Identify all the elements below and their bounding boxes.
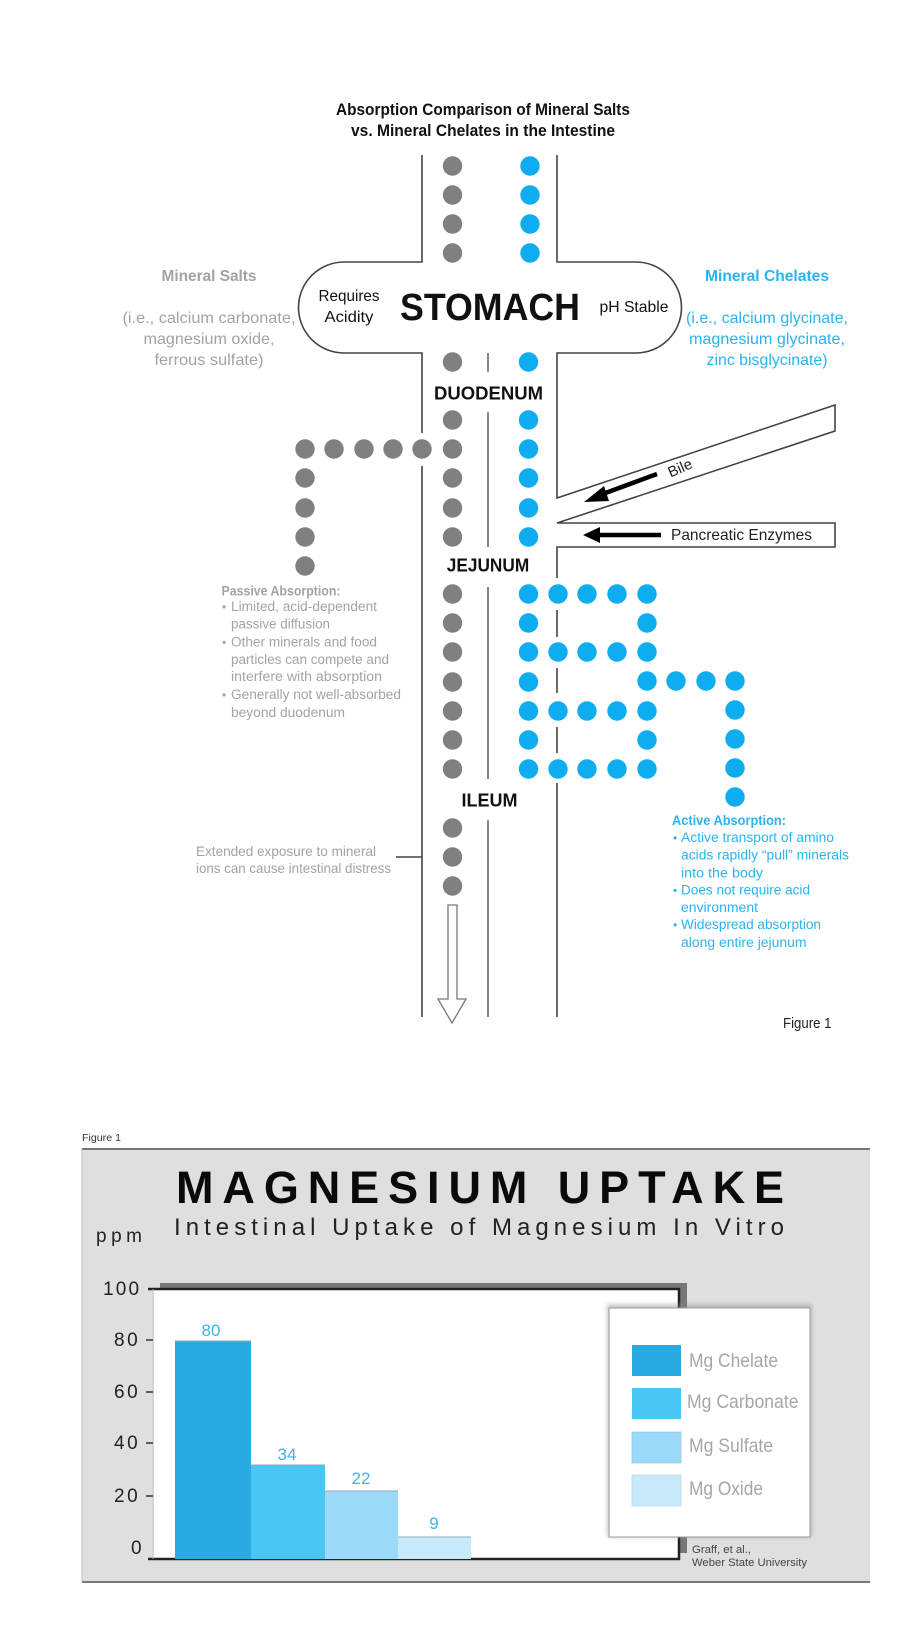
source note: Weber State University bbox=[692, 1557, 807, 1569]
legend bbox=[607, 1304, 812, 1537]
passive absorption text: interfere with absorption bbox=[231, 669, 382, 684]
mineral chelates label bbox=[686, 268, 848, 369]
intestine section labels: ILEUM bbox=[462, 790, 518, 810]
title: Absorption Comparison of Mineral Salts bbox=[336, 101, 630, 119]
mineral chelates label: zinc bisglycinate) bbox=[706, 352, 828, 369]
source note: Graff, et al., bbox=[692, 1544, 751, 1556]
mineral chelates label: magnesium glycinate, bbox=[689, 331, 845, 348]
bar values bbox=[202, 1321, 439, 1533]
legend: Mg Carbonate bbox=[687, 1391, 798, 1413]
passive absorption text: Passive Absorption: bbox=[222, 584, 340, 598]
active absorption text: Active transport of amino bbox=[681, 830, 834, 845]
mineral chelates blue dots path bbox=[519, 156, 745, 807]
source note bbox=[692, 1544, 807, 1569]
passive absorption text: passive diffusion bbox=[231, 616, 330, 632]
passive absorption text: • bbox=[222, 600, 226, 614]
passive absorption text: Limited, acid-dependent bbox=[231, 599, 377, 614]
bars bbox=[175, 1341, 471, 1559]
bile arrow and label bbox=[584, 456, 695, 502]
y axis labels bbox=[103, 1279, 142, 1559]
intestine section labels bbox=[434, 382, 543, 810]
mineral salts label: ferrous sulfate) bbox=[154, 352, 264, 369]
bar values: 80 bbox=[202, 1321, 220, 1340]
title bbox=[336, 101, 630, 140]
mineral salts label: Mineral Salts bbox=[162, 268, 257, 285]
bar values: 34 bbox=[278, 1445, 296, 1464]
mineral salts label bbox=[122, 268, 296, 369]
legend: Mg Sulfate bbox=[689, 1435, 773, 1457]
active absorption text: • bbox=[673, 918, 677, 932]
y axis unit: ppm bbox=[96, 1226, 142, 1247]
intestine section labels: JEJUNUM bbox=[447, 554, 529, 576]
stomach labels: pH Stable bbox=[600, 299, 669, 316]
passive absorption text: Generally not well-absorbed bbox=[231, 687, 401, 702]
active absorption text: Widespread absorption bbox=[681, 917, 821, 932]
bar values: 22 bbox=[352, 1469, 370, 1488]
y axis labels: 60 bbox=[114, 1382, 140, 1403]
active absorption text: Active Absorption: bbox=[672, 813, 786, 828]
active absorption text: acids rapidly “pull” minerals bbox=[681, 848, 849, 862]
active absorption text: environment bbox=[681, 900, 758, 915]
intestinal distress note bbox=[196, 843, 391, 876]
passive absorption text: particles can compete and bbox=[231, 652, 389, 667]
intestine walls and stomach outline bbox=[298, 155, 835, 1017]
mineral chelates label: Mineral Chelates bbox=[705, 268, 829, 285]
intestine section labels: DUODENUM bbox=[434, 382, 543, 404]
passive absorption text: • bbox=[222, 636, 226, 650]
stomach labels bbox=[318, 287, 669, 329]
mineral salts label: magnesium oxide, bbox=[144, 331, 274, 348]
legend: Mg Oxide bbox=[689, 1478, 763, 1500]
subheading: Intestinal Uptake of Magnesium In Vitro bbox=[174, 1214, 784, 1241]
hollow down arrow bbox=[438, 905, 466, 1023]
mineral chelates label: (i.e., calcium glycinate, bbox=[686, 310, 848, 327]
pancreatic enzymes arrow and label bbox=[583, 527, 812, 544]
bar values: 9 bbox=[429, 1514, 439, 1533]
y axis labels: 40 bbox=[114, 1433, 140, 1454]
heading: MAGNESIUM UPTAKE bbox=[176, 1162, 784, 1213]
stomach labels: Requires bbox=[318, 288, 380, 305]
bar chart bbox=[103, 1279, 687, 1559]
intestinal distress note: ions can cause intestinal distress bbox=[196, 860, 391, 876]
y axis labels: 0 bbox=[131, 1538, 142, 1559]
figure 1 caption: Figure 1 bbox=[783, 1016, 832, 1032]
pancreatic enzymes arrow and label: Pancreatic Enzymes bbox=[671, 527, 812, 544]
passive absorption text bbox=[222, 584, 401, 720]
active absorption text: into the body bbox=[681, 866, 763, 880]
bile arrow and label: Bile bbox=[665, 456, 695, 481]
active absorption text: • bbox=[673, 831, 677, 845]
mineral salts gray dots path bbox=[295, 156, 462, 896]
panel: magnesium uptake bbox=[82, 1149, 870, 1582]
small figure caption: Figure 1 bbox=[82, 1133, 121, 1144]
y axis labels: 80 bbox=[114, 1330, 140, 1351]
y axis labels: 100 bbox=[103, 1279, 141, 1300]
intestinal distress note: Extended exposure to mineral bbox=[196, 843, 376, 859]
passive absorption text: beyond duodenum bbox=[231, 705, 345, 720]
mineral salts label: (i.e., calcium carbonate, bbox=[122, 310, 296, 327]
title: vs. Mineral Chelates in the Intestine bbox=[351, 122, 615, 140]
active absorption text: • bbox=[673, 884, 677, 898]
stomach labels: STOMACH bbox=[400, 287, 580, 329]
legend: Mg Chelate bbox=[689, 1350, 778, 1372]
passive absorption text: Other minerals and food bbox=[231, 634, 377, 650]
active absorption text: Does not require acid bbox=[681, 882, 810, 898]
passive absorption text: • bbox=[222, 688, 226, 702]
y axis labels: 20 bbox=[114, 1486, 140, 1507]
stomach labels: Acidity bbox=[324, 309, 374, 326]
active absorption text bbox=[672, 813, 849, 950]
active absorption text: along entire jejunum bbox=[681, 935, 806, 950]
